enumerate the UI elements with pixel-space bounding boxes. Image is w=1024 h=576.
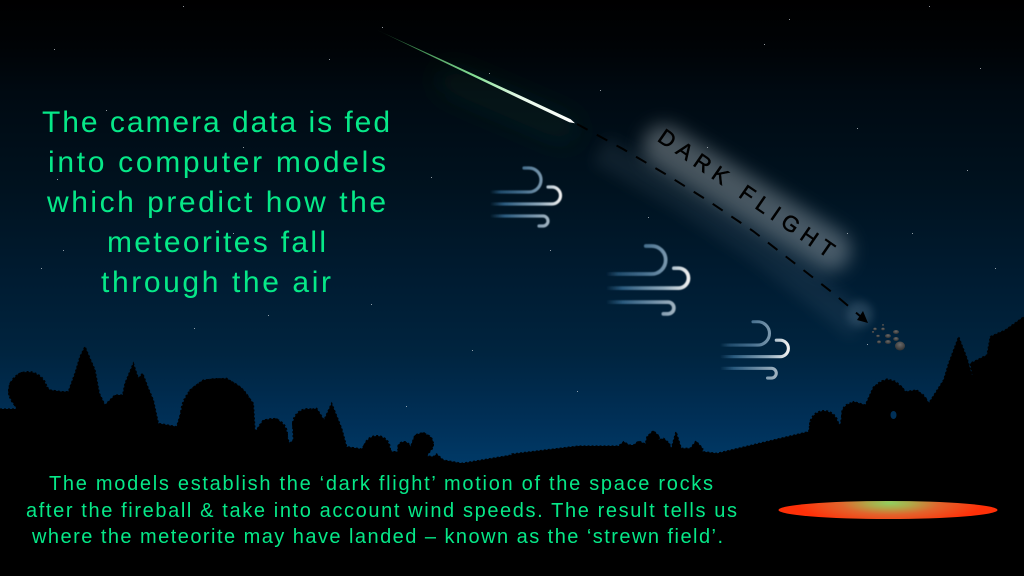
meteor fireball streak xyxy=(377,30,575,134)
body text: where the meteorite may have landed – known as the ‘strewn field’. xyxy=(31,526,723,548)
heading text: through the air xyxy=(101,266,331,299)
heading text: into computer models xyxy=(48,146,386,179)
silhouette: right hill and treeline xyxy=(512,317,1024,540)
falling meteorite fragments xyxy=(872,324,905,350)
body text xyxy=(26,473,737,548)
body text: after the fireball & take into account wind speeds. The result tells us xyxy=(26,500,737,522)
rounded tree crowns, left xyxy=(9,372,433,462)
dark flight dashed arrow xyxy=(577,124,868,323)
label: dark flight: DARK FLIGHT xyxy=(654,124,844,266)
body text: The models establish the ‘dark flight’ motion of the space rocks xyxy=(49,473,713,495)
strewn field ellipse xyxy=(778,501,998,519)
icon: wind gust 1 xyxy=(490,168,560,226)
icon: wind gust 2 xyxy=(606,246,688,314)
heading text: The camera data is fed xyxy=(42,106,390,139)
gap of sky between right trees xyxy=(890,411,896,419)
silhouette: left hill and treeline xyxy=(0,347,512,530)
glow behind dark flight label and path xyxy=(600,146,873,327)
heading text: which predict how the xyxy=(46,186,386,219)
ground fill xyxy=(0,463,1024,576)
stars xyxy=(41,6,996,407)
rounded tree crowns, right xyxy=(810,380,927,439)
heading text xyxy=(42,106,390,299)
heading text: meteorites fall xyxy=(107,226,326,259)
icon: wind gust 3 xyxy=(720,322,788,378)
